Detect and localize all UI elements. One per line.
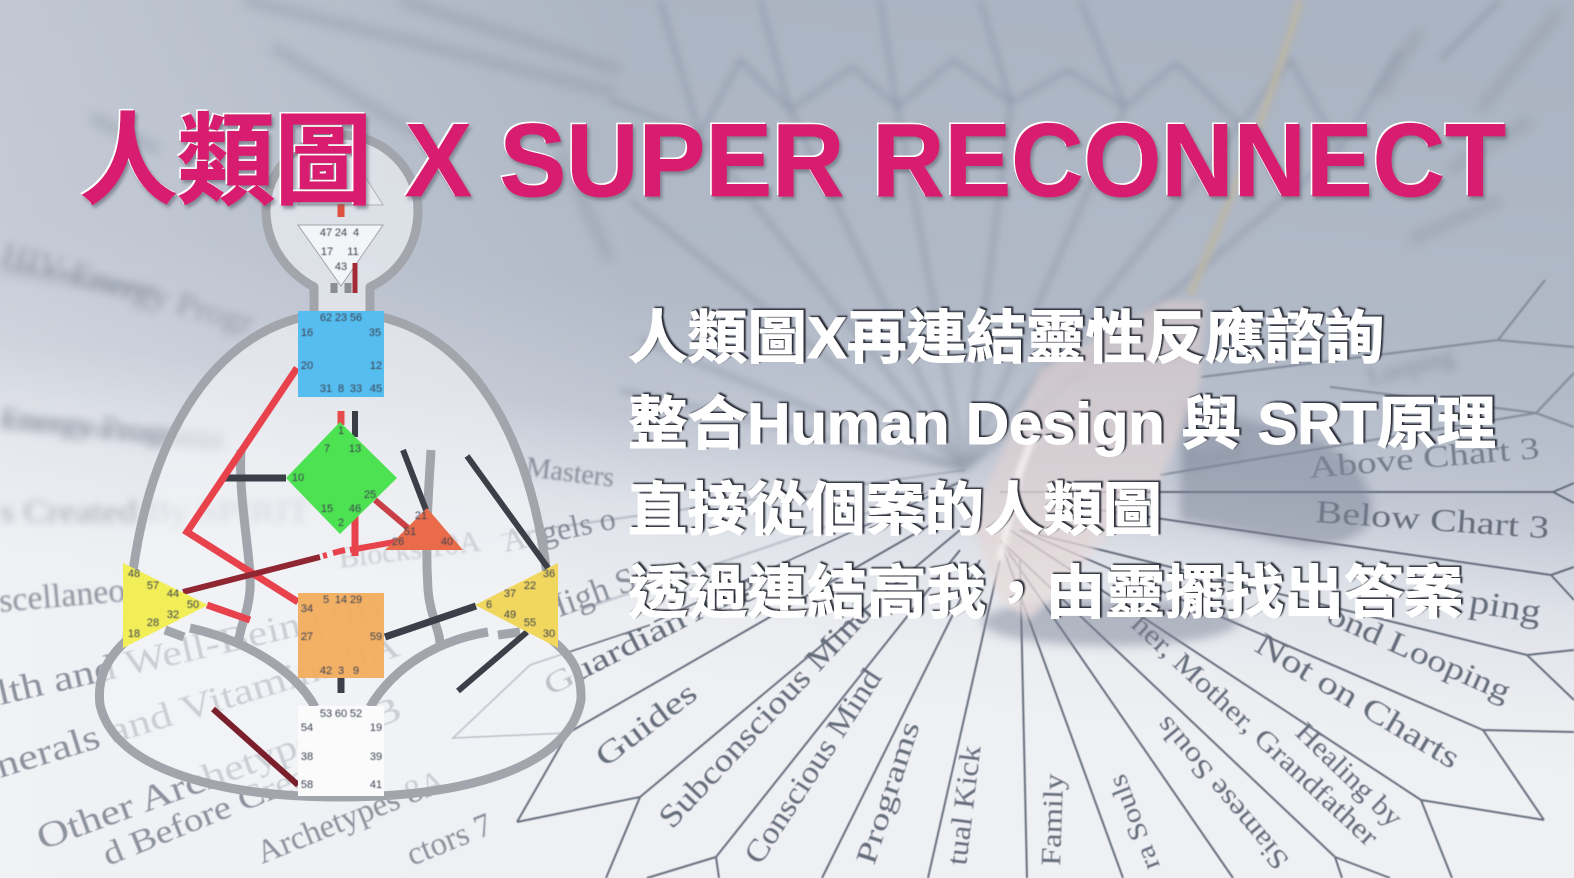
gate numbers: 20 <box>301 360 313 372</box>
gate numbers: 27 <box>301 631 313 643</box>
sacral centre <box>298 593 384 678</box>
gate numbers: 4 <box>353 227 359 239</box>
chart labels left: Angels o <box>499 500 619 559</box>
chart labels right and bottom: Conscious Mind <box>737 662 889 870</box>
gate numbers: 14 <box>335 594 347 606</box>
gate numbers: 42 <box>320 665 332 677</box>
blurred chart labels upper left: Energy Programs <box>0 399 227 455</box>
gate numbers: 39 <box>370 751 382 763</box>
gate numbers: 16 <box>301 327 313 339</box>
gate numbers: 21 <box>415 510 427 522</box>
chart labels left: Archetypes 8A <box>252 763 451 871</box>
gate numbers: 18 <box>128 628 140 640</box>
gate numbers: 46 <box>349 503 361 515</box>
gate numbers: 41 <box>370 779 382 791</box>
chart labels left: nerals and Vitamins 9A <box>0 625 404 786</box>
gate numbers: 19 <box>370 722 382 734</box>
chart labels right and bottom: Not on Charts <box>1249 625 1467 775</box>
description text: 透過連結高我，由靈擺找出答案 <box>628 561 1463 626</box>
chart labels right and bottom: Guardian Ang <box>538 566 763 702</box>
chart labels right and bottom: ond Looping <box>1322 596 1516 709</box>
gate numbers: 26 <box>392 536 404 548</box>
gate numbers: 2 <box>338 517 344 529</box>
blurred chart labels upper left: HIV-Energy Progr <box>0 234 258 340</box>
gate numbers: 15 <box>321 503 333 515</box>
radial chart upper blurred spokes <box>610 0 1500 470</box>
gate numbers: 25 <box>364 489 376 501</box>
chart labels left: Blocks 10A <box>337 525 483 575</box>
chart labels right and bottom: Guides <box>588 675 703 774</box>
gate numbers: 58 <box>301 779 313 791</box>
description text: 整合Human Design 與 SRT原理 <box>628 392 1496 457</box>
gate numbers: 60 <box>335 708 347 720</box>
gate numbers: 55 <box>524 617 536 629</box>
pendulum shadow <box>982 400 1372 646</box>
gate numbers: 28 <box>147 617 159 629</box>
gate numbers: 51 <box>404 526 416 538</box>
gate numbers: 7 <box>324 443 330 455</box>
gate numbers: 10 <box>292 472 304 484</box>
chart labels left: High Se <box>535 554 656 630</box>
heart centre <box>385 508 463 550</box>
gate numbers: 53 <box>320 708 332 720</box>
channels <box>183 204 548 785</box>
crystal highlight <box>1000 420 1040 560</box>
chart labels right and bottom: Subconscious Mind <box>651 594 879 835</box>
description text: 人類圖X再連結靈性反應諮詢 <box>628 306 1384 371</box>
chart labels left: Other Archetypes, 8B <box>31 688 407 858</box>
gate numbers: 49 <box>504 609 516 621</box>
gate numbers: 45 <box>370 383 382 395</box>
gate numbers: 11 <box>347 246 359 258</box>
gate numbers: 1 <box>338 425 344 437</box>
gate numbers: 57 <box>147 580 159 592</box>
blurred text rows upper left <box>0 0 1560 445</box>
chart labels left: lth and Well-Being 9B <box>0 585 387 713</box>
body outline <box>99 135 581 797</box>
chart labels right and bottom: ra Souls <box>1102 770 1166 875</box>
pendulum crystal <box>970 300 1205 620</box>
gate numbers: 22 <box>524 580 536 592</box>
gate numbers: 6 <box>486 599 492 611</box>
chart labels right and bottom: Healing by <box>1289 717 1409 834</box>
gate numbers: 35 <box>369 327 381 339</box>
inner body curves <box>165 450 520 707</box>
gate numbers: 37 <box>504 588 516 600</box>
blurred chart labels upper left <box>0 234 1457 529</box>
gate numbers: 48 <box>128 568 140 580</box>
chart labels right and bottom: Above Chart 3 <box>1308 430 1541 485</box>
blurred chart labels upper left: Looping <box>1364 341 1457 391</box>
gate numbers: 9 <box>353 665 359 677</box>
solar plexus centre <box>475 563 558 648</box>
gate numbers: 24 <box>335 227 347 239</box>
chart labels left: d Before Creation <box>98 735 371 873</box>
chart labels right and bottom: Family <box>1036 773 1070 866</box>
gate numbers: 40 <box>441 536 453 548</box>
gate numbers: 52 <box>350 708 362 720</box>
gate numbers: 12 <box>370 360 382 372</box>
gate numbers: 43 <box>335 261 347 273</box>
root centre <box>298 706 384 796</box>
gate numbers: 54 <box>301 722 313 734</box>
chart labels right and bottom <box>538 430 1550 875</box>
gate numbers: 59 <box>370 631 382 643</box>
chart labels left: Masters <box>524 452 616 494</box>
gate numbers <box>128 227 555 791</box>
description text: 直接從個案的人類圖 <box>628 478 1162 543</box>
gate numbers: 50 <box>187 599 199 611</box>
gate numbers: 13 <box>349 443 361 455</box>
gate numbers: 34 <box>301 603 313 615</box>
title: 人類圖 <box>80 106 372 218</box>
gate numbers: 3 <box>338 665 344 677</box>
gate numbers: 62 <box>320 312 332 324</box>
gate numbers: 38 <box>301 751 313 763</box>
gate numbers: 23 <box>335 312 347 324</box>
description text <box>628 306 1496 626</box>
pendulum chain <box>1190 0 1300 295</box>
gate numbers: 36 <box>543 568 555 580</box>
g centre <box>286 422 397 534</box>
gate numbers: 30 <box>543 628 555 640</box>
gate numbers: 5 <box>323 594 329 606</box>
gate numbers: 56 <box>350 312 362 324</box>
gate numbers: 31 <box>320 383 332 395</box>
chart labels left <box>0 452 656 873</box>
chart labels right and bottom: tual Kick <box>941 743 988 867</box>
gate numbers: 8 <box>338 383 344 395</box>
head centre <box>298 140 383 205</box>
chart labels right and bottom: ping <box>1467 583 1544 631</box>
spleen centre <box>123 563 208 648</box>
gate numbers: 29 <box>350 594 362 606</box>
chart labels left: ctors 7 <box>402 807 497 873</box>
title: X SUPER RECONNECT <box>405 103 1506 219</box>
gate numbers: 44 <box>167 588 179 600</box>
human design bodygraph <box>99 135 581 797</box>
chart labels right and bottom: Below Chart 3 <box>1315 493 1550 545</box>
chart labels right and bottom: Programs <box>850 718 926 868</box>
ajna centre <box>298 225 383 286</box>
gate numbers: 32 <box>167 609 179 621</box>
chart labels right and bottom: Siamese Souls <box>1149 710 1295 875</box>
blurred chart labels upper left: s Created By SPIRIT <box>0 493 311 529</box>
radial chart right mid spokes <box>1160 280 1574 475</box>
gate numbers: 47 <box>320 227 332 239</box>
chart labels right and bottom: her, Mother, Grandfather <box>1125 608 1385 853</box>
radial chart lower sharp spokes <box>453 470 1574 878</box>
chart labels left: scellaneous <box>0 569 157 620</box>
blurred chart labels upper left: Brain <box>1182 435 1245 476</box>
gate numbers: 33 <box>350 383 362 395</box>
throat centre <box>298 311 384 397</box>
gate numbers: 17 <box>321 246 333 258</box>
